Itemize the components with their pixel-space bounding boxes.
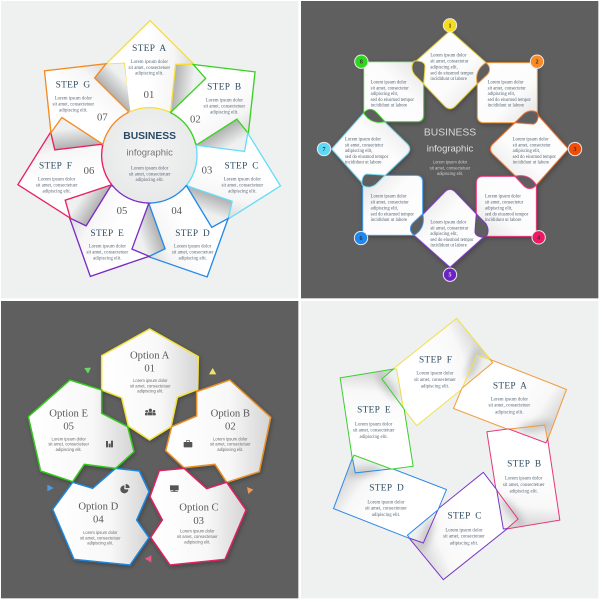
step C: adipiscing elit. (228, 189, 257, 194)
option B text: adipiscing elit. (217, 447, 243, 452)
step B (155, 37, 290, 173)
part 4 text: sed do eiusmod tempor (485, 212, 529, 217)
step C: adipiscing elit. (450, 542, 478, 547)
option C text: sit amet, consectetuer (177, 534, 218, 539)
part 6 text: Lorem ipsum dolor (371, 195, 407, 200)
marker triangles (47, 368, 253, 562)
option B text: Option B (211, 408, 250, 419)
part 7 text (345, 137, 389, 166)
part 2 text: sit amet, consectetur (488, 86, 526, 91)
step C: STEP C (225, 161, 259, 171)
centre circle: sit amet, consectetuer (129, 172, 171, 177)
option D text: 04 (93, 515, 104, 526)
option C text: Option C (179, 503, 219, 514)
step A: adipiscing elit. (135, 72, 164, 77)
icon: people (145, 409, 156, 415)
number badges: 8 (360, 60, 363, 66)
step D: Lorem ipsum dolor (367, 500, 405, 505)
step F: Lorem ipsum dolor (38, 177, 76, 182)
option B text (210, 408, 251, 452)
step F: adipiscing elit. (42, 189, 71, 194)
part 5 text: sed do eiusmod tempor (430, 238, 474, 243)
part 1 text: sit amet, consectetur (430, 60, 469, 65)
step A: 01 (144, 90, 154, 101)
part 8 text (371, 80, 414, 109)
centre circle: infographic (126, 148, 173, 159)
step D: adipiscing elit. (178, 257, 207, 262)
part 3 text (513, 137, 556, 166)
part 2 text: Lorem ipsum dolor (488, 80, 524, 85)
step D (117, 174, 247, 301)
step D: adipiscing elit. (372, 513, 400, 518)
icon: pie chart (120, 484, 130, 493)
option D text: sit amet, consectetuer (80, 535, 121, 540)
icon: bar chart (106, 441, 113, 447)
part 3 text: incididunt ut labore (513, 161, 549, 166)
option E text: 05 (63, 422, 74, 433)
step E: STEP E (357, 405, 391, 415)
step C (409, 472, 507, 580)
step F: adipiscing elit. (421, 385, 449, 390)
step D: 04 (171, 206, 183, 217)
step A: STEP A (132, 44, 166, 54)
number badges (317, 19, 582, 281)
step C (178, 122, 290, 240)
step E: adipiscing elit. (359, 435, 388, 440)
option C text (177, 503, 219, 544)
part 2 text (488, 80, 531, 109)
step A: STEP A (493, 381, 527, 391)
part 5 text: adipiscing elit, (430, 232, 458, 237)
option C text: adipiscing elit. (184, 539, 210, 544)
part 1 to 8 shapes (332, 31, 568, 267)
centre circle: BUSINESS (123, 131, 176, 142)
step B: STEP B (207, 83, 241, 93)
step F: sit amet, consectetuer (414, 378, 456, 383)
option B text: 02 (225, 422, 236, 433)
number badges: 1 (448, 23, 451, 29)
step C: sit amet, consectetuer (221, 183, 264, 188)
step C: sit amet, consectetuer (443, 535, 485, 540)
part 8 text: adipiscing elit, (371, 92, 398, 97)
option E text: Option E (49, 408, 88, 419)
step G (17, 28, 151, 163)
step A (106, 21, 205, 113)
part 7 text: sed do eiusmod tempor (345, 155, 389, 160)
part 4 text: Lorem ipsum dolor (485, 195, 521, 200)
option B text: Lorem ipsum dolor (213, 436, 248, 441)
part 5 text: sit amet, consectetur (430, 226, 469, 231)
option C text: 03 (193, 516, 204, 527)
part 1 text: incididunt ut labore (430, 77, 467, 82)
step A (452, 358, 568, 440)
part 6 text: incididunt ut labore (371, 218, 407, 223)
step E: 05 (117, 206, 127, 217)
option E text: adipiscing elit. (56, 447, 82, 452)
option A text: adipiscing elit. (137, 389, 163, 394)
part 6 text: adipiscing elit, (371, 206, 398, 211)
option A text: sit amet, consectetuer (130, 383, 171, 388)
number badges: 6 (359, 236, 362, 242)
step E: Lorem ipsum dolor (355, 422, 393, 427)
centre title: Lorem ipsum dolor (433, 160, 468, 165)
step F: 06 (84, 166, 95, 177)
step D: Lorem ipsum dolor (174, 245, 212, 250)
step B: STEP B (507, 460, 541, 470)
number badges: 2 (535, 60, 538, 66)
part 7 text: Lorem ipsum dolor (345, 137, 381, 142)
number badges: 3 (573, 147, 576, 153)
part 3 text: Lorem ipsum dolor (513, 137, 549, 142)
step B: Lorem ipsum dolor (206, 99, 243, 104)
step D: STEP D (369, 484, 404, 494)
step G: adipiscing elit. (59, 109, 88, 114)
part 2 text: sed do eiusmod tempor (488, 98, 531, 103)
panel: five options on dark (1, 301, 298, 598)
step C: Lorem ipsum dolor (224, 177, 261, 182)
part 1 text: sed do eiusmod tempor (430, 71, 474, 76)
option E text: sit amet, consectetuer (48, 442, 90, 447)
part 7 text: incididunt ut labore (345, 161, 381, 166)
option shapes (28, 329, 271, 565)
step G: sit amet, consectetuer (52, 103, 95, 108)
part 8 text: sed do eiusmod tempor (371, 98, 414, 103)
step D: STEP D (175, 229, 210, 239)
step C: Lorem ipsum dolor (445, 529, 483, 534)
step B: adipiscing elit. (210, 111, 239, 116)
part 3 text: adipiscing elit, (513, 149, 540, 154)
overlap holes between parts (362, 61, 538, 237)
option A text: 01 (144, 364, 155, 375)
part 5 text: Lorem ipsum dolor (430, 220, 467, 225)
part 6 text: sed do eiusmod tempor (371, 212, 414, 217)
number badges: 4 (537, 235, 540, 241)
part 4 text: sit amet, consectetur (485, 201, 524, 206)
panel: six-step pinwheel (301, 301, 598, 598)
part 3 text: sit amet, consectetur (513, 143, 551, 148)
option A text (130, 351, 171, 394)
part 4 text: incididunt ut labore (485, 218, 521, 223)
part 4 text (485, 195, 529, 223)
step D: sit amet, consectetuer (365, 507, 407, 512)
part 6 text (371, 195, 414, 223)
centre circle (98, 108, 200, 207)
option A text: Lorem ipsum dolor (133, 378, 168, 383)
step F: Lorem ipsum dolor (416, 372, 454, 377)
step B: sit amet, consectetuer (203, 105, 246, 110)
option D text (78, 501, 121, 546)
step G: Lorem ipsum dolor (55, 97, 92, 102)
option D text: adipiscing elit. (87, 541, 113, 546)
option A text: Option A (130, 351, 170, 362)
part 8 text: incididunt ut labore (371, 104, 407, 109)
part 6 text: sit amet, consectetur (371, 201, 409, 206)
part 8 text: sit amet, consectetur (371, 86, 409, 91)
step E: adipiscing elit. (93, 257, 122, 262)
part 2 text: adipiscing elit, (488, 92, 515, 97)
centre title: sit amet, consectetuer (430, 165, 471, 170)
panel: eight-part ring on dark (301, 1, 598, 298)
step G: STEP G (56, 81, 90, 91)
part 8 text: Lorem ipsum dolor (371, 80, 407, 85)
step B: 02 (190, 115, 201, 126)
option D text: Option D (78, 501, 119, 512)
step B: Lorem ipsum dolor (505, 477, 543, 482)
centre circle: adipiscing elit. (135, 178, 164, 183)
part 7 text: adipiscing elit, (345, 149, 372, 154)
part 4 text: adipiscing elit, (485, 206, 512, 211)
part 7 text: sit amet, consectetur (345, 143, 384, 148)
step F (6, 110, 118, 228)
step E: STEP E (90, 229, 124, 239)
option D text: Lorem ipsum dolor (83, 530, 118, 535)
step F: sit amet, consectetuer (36, 183, 78, 188)
step E: Lorem ipsum dolor (89, 245, 126, 250)
step F (393, 318, 491, 426)
step D: sit amet, consectetuer (172, 251, 214, 256)
centre circle: Lorem ipsum dolor (131, 166, 169, 171)
part 5 text: incididunt ut labore (430, 244, 467, 249)
option E text: Lorem ipsum dolor (51, 436, 86, 441)
step C: 03 (202, 165, 212, 176)
part 2 text: incididunt ut labore (488, 104, 524, 109)
step A: sit amet, consectetuer (488, 404, 531, 409)
step E: sit amet, consectetuer (86, 251, 129, 256)
part 1 text (430, 54, 474, 82)
panel: seven-step flower (1, 1, 298, 301)
step F: STEP F (419, 355, 452, 365)
step G: 07 (97, 113, 108, 124)
number badges: 5 (448, 273, 451, 279)
part 1 text: Lorem ipsum dolor (430, 54, 467, 59)
centre title: BUSINESS (424, 127, 476, 138)
step A: Lorem ipsum dolor (131, 60, 168, 65)
step E: sit amet, consectetuer (353, 428, 395, 433)
part 3 text: sed do eiusmod tempor (513, 155, 556, 160)
step B: sit amet, consectetuer (503, 483, 545, 488)
option C text: Lorem ipsum dolor (180, 529, 215, 534)
step A: adipiscing elit. (495, 411, 524, 416)
step C: STEP C (448, 512, 482, 522)
icon: monitor (170, 485, 179, 492)
number badges: 7 (322, 147, 325, 153)
step E (40, 169, 170, 296)
option E text (48, 408, 90, 452)
icon: briefcase (184, 441, 192, 447)
part 1 text: adipiscing elit, (430, 65, 458, 70)
step F: STEP F (39, 161, 72, 171)
centre title: infographic (427, 143, 473, 154)
centre title (424, 127, 476, 176)
step E (340, 368, 414, 470)
step B: adipiscing elit. (509, 489, 538, 494)
part 5 text (430, 220, 474, 249)
step B (486, 428, 560, 530)
step A: Lorem ipsum dolor (491, 398, 528, 403)
step A: sit amet, consectetuer (128, 66, 171, 71)
option B text: sit amet, consectetuer (210, 442, 251, 447)
step D (332, 458, 448, 540)
centre title: adipiscing elit. (437, 171, 463, 176)
